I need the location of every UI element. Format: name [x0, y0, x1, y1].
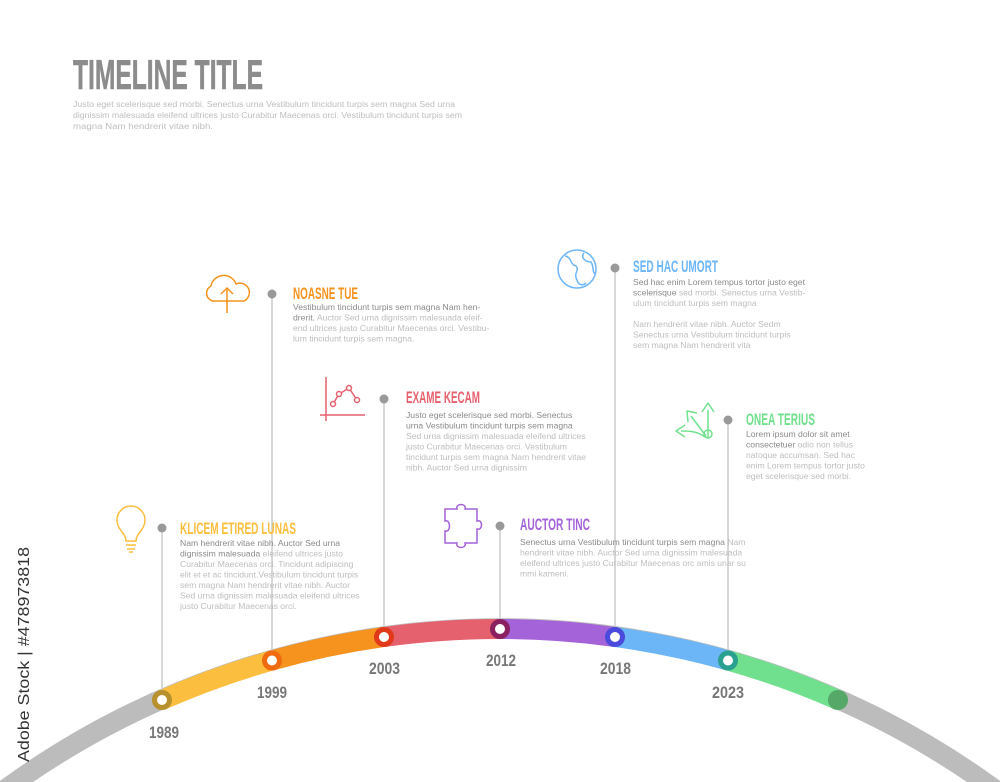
side credit text: Adobe Stock | #478973818: [16, 547, 33, 762]
event: 1989 KLICEM ETIRED LUNAS: Nam hendrerit vitae nibh. Auctor Sed urna: [180, 538, 340, 548]
event: 2023 ONEA TERIUS: [676, 403, 865, 481]
event: 1989 KLICEM ETIRED LUNAS: KLICEM ETIRED LUNAS: [180, 519, 296, 538]
year labels: 2003: [369, 659, 400, 678]
event: 2023 ONEA TERIUS: ONEA TERIUS: [746, 410, 815, 429]
event: 2003 EXAME KECAM: tincidunt turpis sem magna Nam hendrerit vitae: [406, 452, 586, 462]
event: 1999 NOASNE TUE: drerit. Auctor Sed urna dignissim malesuada eleif-: [293, 312, 483, 322]
year labels: 1989: [149, 723, 179, 742]
event: 2012 AUCTOR TINC: Senectus urna Vestibulum tincidunt turpis sem magna Nam: [520, 537, 745, 547]
connector top dots: [158, 264, 732, 532]
arc: colored segments: [162, 629, 838, 700]
event: 2018 SED HAC UMORT: scelerisque sed morbi. Senectus urna Vestib-: [633, 288, 806, 298]
intro text: Justo eget scelerisque sed morbi. Senectus urna Vestibulum tincidunt turpis sem magna Sed urna: [73, 99, 455, 109]
event: 2003 EXAME KECAM: [320, 377, 586, 472]
event: 1999 NOASNE TUE: lum tincidunt turpis sem magna.: [293, 334, 414, 344]
event: 2023 ONEA TERIUS: eget scelerisque sed morbi.: [746, 471, 851, 481]
event: 2018 SED HAC UMORT: SED HAC UMORT: [633, 257, 718, 276]
year labels: 1999: [257, 683, 287, 702]
event: 2003 EXAME KECAM: urna Vestibulum tincidunt turpis sem magna: [406, 420, 573, 430]
event: 1999 NOASNE TUE: Vestibulum tincidunt turpis sem magna Nam hen-: [293, 302, 480, 312]
event: 2012 AUCTOR TINC: [445, 504, 746, 578]
intro text: dignissim malesuada eleifend ultrices justo Curabitur Maecenas orci. Vestibulum tincidunt turpis sem: [73, 110, 462, 120]
event: 2003 EXAME KECAM: Sed urna dignissim malesuada eleifend ultrices: [406, 431, 586, 441]
event: 2023 ONEA TERIUS: natoque accumsan. Sed hac: [746, 450, 856, 460]
event: 2023 ONEA TERIUS: Lorem ipsum dolor sit amet: [746, 429, 850, 439]
event: 2023 ONEA TERIUS: enim Lorem tempus tortor justo: [746, 460, 865, 470]
event: 2023 ONEA TERIUS: consectetuer odio non tellus: [746, 440, 853, 450]
year labels: 2018: [600, 659, 631, 678]
event: 2012 AUCTOR TINC: AUCTOR TINC: [520, 515, 590, 534]
event: 1989 KLICEM ETIRED LUNAS: Sed urna dignissim malesuada eleifend ultrices: [180, 590, 360, 600]
event: 2018 SED HAC UMORT: sem magna Nam hendrerit vita: [633, 340, 751, 350]
event: 1989 KLICEM ETIRED LUNAS: sem magna Nam hendrerit vitae nibh. Auctor: [180, 580, 350, 590]
arc: grey base: [0, 628, 1000, 782]
event: 2018 SED HAC UMORT: Senectus urna Vestibulum tincidunt turpis: [633, 330, 791, 340]
event: 2018 SED HAC UMORT: ulum tincidunt turpis sem magna: [633, 298, 757, 308]
icon: diverging arrows: [676, 403, 714, 438]
title: TIMELINE TITLE: [73, 51, 263, 98]
event: 2003 EXAME KECAM: Justo eget scelerisque sed morbi. Senectus: [406, 410, 572, 420]
intro text: magna Nam hendrerit vitae nibh.: [73, 121, 213, 131]
icon: cloud upload: [207, 275, 249, 313]
icon: puzzle piece: [445, 504, 482, 548]
connector lines: [162, 268, 728, 700]
event: 2003 EXAME KECAM: nibh. Auctor Sed urna dignissim: [406, 462, 527, 472]
event: 1989 KLICEM ETIRED LUNAS: elit et et ac tincidunt.Vestibulum tincidunt turpis: [180, 570, 358, 580]
event: 1999 NOASNE TUE: end ultrices justo Curabitur Maecenas orci. Vestibu-: [293, 323, 489, 333]
event: 2018 SED HAC UMORT: [558, 250, 806, 350]
event: 1999 NOASNE TUE: [207, 275, 489, 344]
intro text: [73, 99, 462, 131]
event: 2018 SED HAC UMORT: Nam hendrerit vitae nibh. Auctor Sedm: [633, 319, 781, 329]
icon: globe: [558, 250, 596, 288]
event: 2003 EXAME KECAM: justo Curabitur Maecenas orci. Vestibulum: [405, 442, 567, 452]
event: 1989 KLICEM ETIRED LUNAS: dignissim malesuada eleifend ultrices justo: [180, 548, 343, 558]
event: 1989 KLICEM ETIRED LUNAS: [117, 506, 360, 611]
icon: line chart: [320, 377, 365, 421]
timeline nodes: [154, 622, 848, 710]
event: 2003 EXAME KECAM: EXAME KECAM: [406, 388, 480, 407]
year labels: [149, 651, 744, 742]
event: 2012 AUCTOR TINC: hendrerit vitae nibh. Auctor Sed urna dignissim malesuada: [520, 548, 742, 558]
event: 2018 SED HAC UMORT: Sed hac enim Lorem tempus tortor justo eget: [633, 277, 806, 287]
event: 2012 AUCTOR TINC: mmi kameni.: [520, 568, 569, 578]
event: 1989 KLICEM ETIRED LUNAS: justo Curabitur Maecenas orci.: [179, 601, 297, 611]
event: 2012 AUCTOR TINC: eleifend ultrices justo Curabitur Maecenas orc amis unar su: [520, 558, 746, 568]
year labels: 2023: [712, 683, 744, 702]
year labels: 2012: [486, 651, 516, 670]
icon: light bulb: [117, 506, 145, 552]
event: 1999 NOASNE TUE: NOASNE TUE: [293, 284, 358, 303]
event: 1989 KLICEM ETIRED LUNAS: Curabitur Maecenas orci. Tincidunt adipiscing: [180, 559, 354, 569]
